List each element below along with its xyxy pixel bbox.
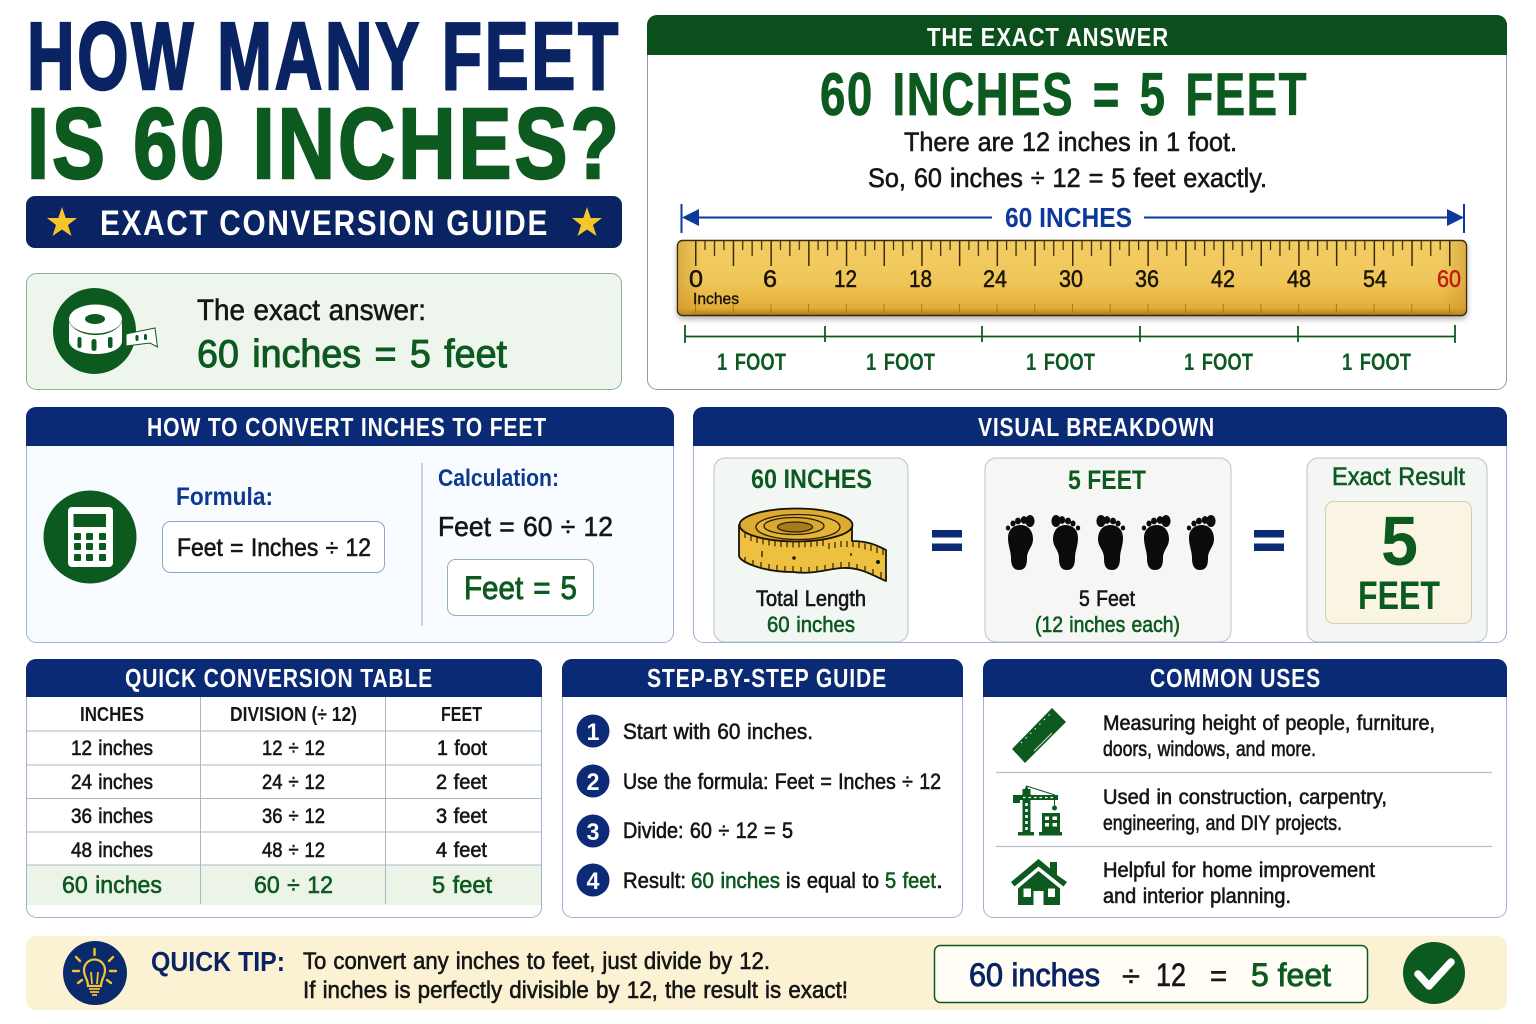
card: 60 inches: Total Length [756,586,866,611]
foot brackets: 1 FOOT [1342,349,1411,376]
table rows: 36 inches [71,805,153,828]
step 2: 2 [586,769,600,796]
heading: how to convert [26,407,674,446]
formula: Formula: [176,483,273,511]
ruler: 36 [1135,266,1159,293]
ruler: Inches [693,291,739,308]
icon: calculator [44,490,136,584]
text: the exact answer [197,294,507,376]
card: exact result: FEET [1358,574,1440,618]
banner: exact conversion guide: EXACT CONVERSION GUIDE [100,204,549,243]
table header row: DIVISION (÷ 12) [230,704,357,726]
table rows: 36 ÷ 12 [262,805,325,828]
table header row: FEET [441,704,482,726]
table rows: 48 ÷ 12 [262,839,325,862]
text: quick tip [303,948,848,1004]
ruler: 60 [1437,266,1461,293]
text: measuring use [1103,712,1435,761]
text: quick tip label: QUICK TIP: [151,946,285,977]
foot brackets: 1 FOOT [866,349,935,376]
heading: step-by-step guide: STEP-BY-STEP GUIDE [647,663,887,693]
card: 60 inches: 60 INCHES [751,464,872,494]
ruler: 18 [909,266,932,293]
text: measuring use: doors, windows, and more. [1103,738,1316,761]
step 4 [576,864,943,896]
headline result: 60 INCHES = 5 FEET [820,61,1308,128]
heading: visual breakdown [693,407,1507,446]
heading: common uses [983,659,1507,697]
text: construction use [1103,786,1387,835]
table header row [80,704,482,726]
ruler: 30 [1059,266,1083,293]
heading: step-by-step guide [562,659,963,697]
table rows: 12 ÷ 12 [262,737,325,760]
quick tip bar [26,936,1507,1010]
table rows: 24 ÷ 12 [262,771,325,794]
text: construction use: engineering, and DIY projects. [1103,812,1342,835]
step 4: . [936,868,943,893]
panel: step-by-step guide [562,659,963,918]
heading: visual breakdown: VISUAL BREAKDOWN [978,412,1215,442]
panel: how to convert [26,407,674,642]
step 4: Result: [623,868,686,893]
table rows: 4 feet [436,839,487,862]
highlighted row: 60 inches: 5 feet [432,872,492,899]
card: 60 inches [714,458,908,642]
foot brackets: 1 FOOT [717,349,786,376]
ruler: 48 [1287,266,1311,293]
step 2: Use the formula: Feet = Inches ÷ 12 [623,769,941,794]
highlighted row background [27,865,541,905]
equation box: ÷ [1122,960,1140,993]
table rows: 24 inches [71,771,153,794]
card: 5 feet: (12 inches each) [1035,612,1180,637]
icon: house [1011,859,1067,905]
heading: common uses: COMMON USES [1150,663,1321,693]
dimension arrow: 60 inches: 60 INCHES [1005,202,1132,233]
banner: exact conversion guide [26,196,622,248]
calculation: Feet = 5 [464,570,577,606]
text: measuring use: Measuring height of people, furniture, [1103,712,1435,735]
icon: check mark [1403,942,1465,1004]
calculation: Feet = 60 ÷ 12 [438,511,613,542]
formula: Feet = Inches ÷ 12 [177,534,371,562]
foot brackets: 1 FOOT [1026,349,1095,376]
text: the exact answer: The exact answer: [197,294,426,327]
icon: five footprints [1006,515,1216,570]
explanation text: There are 12 inches in 1 foot. [904,127,1237,157]
step 4: 60 inches [691,868,780,893]
text: home use [1103,859,1375,908]
calculation [438,465,613,616]
equation box: 12 [1156,957,1186,993]
heading: the exact answer: THE EXACT ANSWER [927,22,1169,52]
card: exact result [1307,458,1487,642]
panel: visual breakdown [693,407,1507,642]
panel: exact answer summary [26,274,622,390]
icon: tape measure badge [53,288,158,374]
table rows: 1 foot [437,737,487,760]
equation box [934,946,1368,1002]
heading: the exact answer [647,15,1507,55]
step 1: Start with 60 inches. [623,719,813,744]
highlighted row: 60 inches: 60 inches [62,872,162,899]
equation box: 5 feet [1251,957,1331,993]
dimension arrow: 60 inches [682,202,1464,233]
table header row: INCHES [80,704,144,726]
equals sign [1254,530,1284,551]
step 3: Divide: 60 ÷ 12 = 5 [623,818,793,843]
foot brackets [685,325,1455,376]
step 4: 4 [586,868,600,895]
icon: construction crane [1013,785,1062,836]
step 4: 5 feet [885,868,936,893]
text: construction use: Used in construction, carpentry, [1103,786,1387,809]
icon: light bulb [63,941,127,1005]
table rows: 12 inches [71,737,153,760]
text: home use: and interior planning. [1103,885,1291,908]
heading: quick conversion table: QUICK CONVERSION TABLE [125,663,433,693]
equation box: = [1210,960,1227,993]
step 4: is equal to [786,868,879,893]
ruler: 42 [1211,266,1235,293]
explanation text: So, 60 inches ÷ 12 = 5 feet exactly. [868,163,1267,193]
panel: quick conversion table [26,659,542,918]
icon: tape roll [739,508,886,581]
table rows: 2 feet [436,771,487,794]
title: IS 60 INCHES? [27,88,622,200]
step 3 [576,814,793,848]
heading: how to convert: HOW TO CONVERT INCHES TO FEET [147,412,547,442]
ruler: 12 [834,266,857,293]
step 2 [576,764,941,798]
table rows: 3 feet [436,805,487,828]
card: 60 inches: 60 inches [767,612,855,637]
ruler: 6 [763,266,777,293]
table rows [71,737,487,862]
heading: quick conversion table [26,659,542,697]
ruler: 54 [1363,266,1387,293]
step 1: 1 [586,719,600,746]
icon: ruler [1012,708,1066,763]
foot brackets: 1 FOOT [1184,349,1253,376]
step 1 [576,714,813,748]
text: home use: Helpful for home improvement [1103,859,1375,882]
ruler [678,240,1466,316]
card: 5 feet [985,458,1231,642]
step 3: 3 [586,819,600,846]
highlighted row: 60 inches [62,872,492,899]
title: HOW MANY FEET [27,3,621,110]
card: exact result: Exact Result [1332,463,1465,491]
formula [162,483,384,572]
card: 5 feet: 5 Feet [1079,586,1135,611]
ruler: 0 [689,266,703,293]
text: the exact answer: 60 inches = 5 feet [197,333,507,376]
highlighted row: 60 inches: 60 ÷ 12 [254,872,333,899]
card: 5 feet: 5 FEET [1068,465,1146,495]
text: quick tip: To convert any inches to feet, just divide by 12. [303,948,770,975]
ruler: 24 [983,266,1007,293]
equation box: 60 inches [969,957,1100,993]
calculation: Calculation: [438,465,559,492]
panel: common uses [983,659,1507,918]
title [27,3,622,200]
explanation text [868,127,1267,193]
card: exact result: 5 [1381,502,1418,580]
table rows: 48 inches [71,839,153,862]
text: quick tip: If inches is perfectly divisible by 12, the result is exact! [303,977,848,1004]
equals sign [932,530,962,551]
panel: the exact answer [647,15,1507,390]
